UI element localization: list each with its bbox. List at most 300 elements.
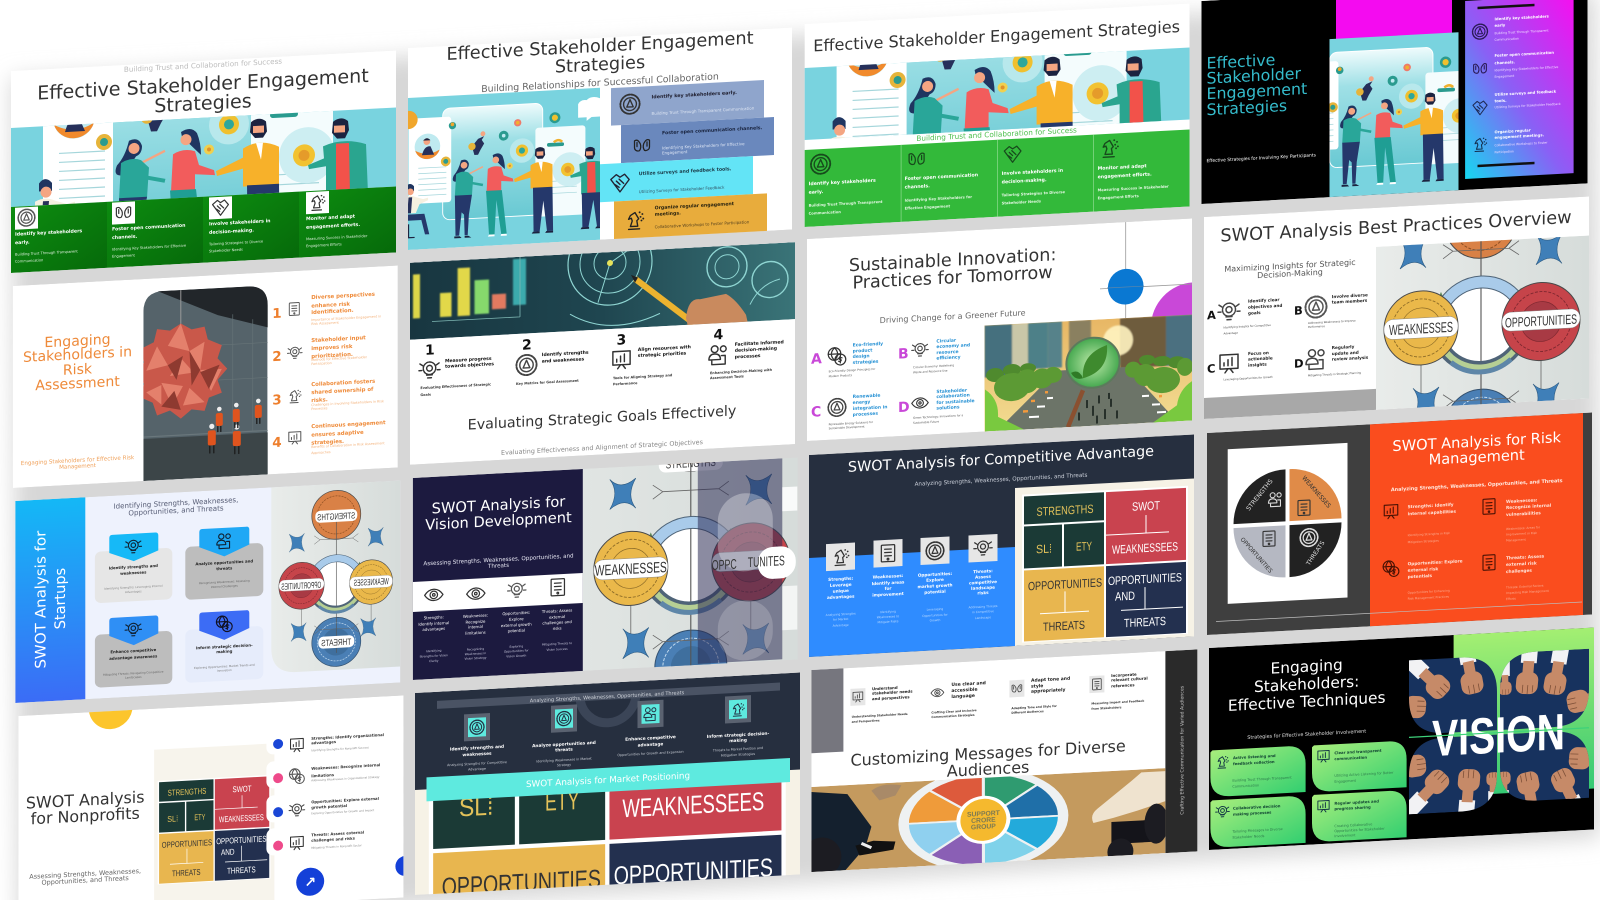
card 2: Utilizing Active Listening for Better bbox=[1334, 771, 1394, 778]
item descriptions: Opportunities for Enhancing bbox=[1408, 589, 1450, 595]
title: Evaluating Strategic Goals Effectively bbox=[468, 403, 737, 434]
gray footer bbox=[1204, 389, 1376, 419]
column headings: Assess bbox=[975, 574, 992, 580]
slide: SWOT Analysis for Vision Development: Mitigating Threats to bbox=[542, 641, 572, 647]
SWOT grid: OPPORTUNITIES bbox=[216, 834, 267, 846]
item headings: internal capabilities bbox=[1408, 509, 1456, 517]
item headings: integration in bbox=[853, 404, 887, 412]
item descriptions: Eco-Friendly Design Principles for bbox=[829, 367, 876, 373]
navy panel bbox=[413, 469, 583, 680]
card 3: making processes bbox=[1233, 810, 1272, 817]
title: Effective bbox=[1206, 50, 1275, 73]
subtitle: Management bbox=[59, 463, 97, 471]
white tile with quadrant pie bbox=[1228, 443, 1348, 604]
title: Customizing Messages for Diverse bbox=[850, 736, 1126, 770]
card 4: Creating Collaborative bbox=[1334, 822, 1372, 828]
box 1: Building Trust Through Transparent Communication bbox=[652, 106, 755, 116]
card 2: Analyze opportunities and bbox=[195, 558, 253, 566]
illustration bbox=[804, 48, 1190, 140]
mirrored SWOT circular diagram: OPPORTUNITIES bbox=[281, 580, 321, 592]
illustration bbox=[1330, 32, 1458, 197]
gradient list panel: channels. bbox=[1494, 59, 1516, 65]
turquoise title band bbox=[426, 758, 790, 801]
title: Strategies bbox=[555, 53, 645, 78]
column headings: potential bbox=[924, 589, 946, 595]
card 1: Advantages bbox=[125, 589, 142, 594]
column headings: Inform strategic decision- bbox=[707, 731, 769, 740]
white list panel: Identifying Strengths for Nonprofit Success bbox=[311, 745, 370, 752]
item headings: Use clear and bbox=[951, 680, 986, 688]
letters: B bbox=[898, 346, 909, 363]
card 2: Internal Challenges bbox=[211, 584, 238, 589]
white list panel: Threats: Assess external bbox=[311, 830, 364, 837]
item descriptions: Efforts bbox=[1506, 597, 1516, 601]
column descriptions: Mitigate Risks bbox=[878, 619, 899, 624]
item descriptions: Goals bbox=[420, 393, 431, 397]
round arrow button bbox=[296, 867, 324, 896]
SWOT grid: THREATS bbox=[1043, 618, 1085, 634]
letters: A bbox=[811, 351, 822, 368]
faint arc decoration bbox=[580, 693, 636, 724]
item descriptions: Sustainable Future bbox=[913, 419, 939, 425]
item headings: Measure progress bbox=[445, 356, 492, 364]
column headings: Threats: bbox=[973, 568, 993, 574]
item descriptions: Enhancing Decision-Making with bbox=[710, 368, 773, 375]
card 1: feedback collection bbox=[1233, 759, 1275, 766]
title: SWOT Analysis Best Practices Overview bbox=[1220, 208, 1572, 247]
gradient list panel: Identify key stakeholders bbox=[1494, 13, 1550, 21]
title: Management bbox=[1429, 447, 1525, 469]
gradient list panel: Utilizing Surveys for Stakeholder Feedback bbox=[1494, 102, 1561, 109]
column descriptions: Growth bbox=[930, 618, 941, 623]
white list panel: limitations bbox=[311, 772, 335, 778]
title: Assessment bbox=[35, 374, 120, 394]
card 4: Regular updates and bbox=[1334, 798, 1379, 806]
item descriptions: Leveraging Opportunities for Growth bbox=[1224, 375, 1273, 381]
column descriptions: Opportunities for bbox=[922, 613, 949, 618]
icon band bbox=[413, 573, 583, 612]
item headings: external risk bbox=[1506, 560, 1537, 568]
gradient list panel: Foster open communication bbox=[1494, 50, 1554, 58]
gradient list panel: Utilize surveys and feedback bbox=[1494, 89, 1557, 97]
slide: SWOT Analysis for Vision Development: Strengths for Vision bbox=[420, 653, 448, 659]
green band: early. bbox=[15, 239, 30, 246]
slide: SWOT Analysis for Vision Development: Identifying bbox=[426, 648, 442, 653]
mirrored SWOT circular diagram bbox=[271, 480, 400, 673]
turquoise title band: SWOT Analysis for Market Positioning bbox=[526, 771, 690, 790]
gradient list panel: engagement meetings. bbox=[1494, 132, 1545, 140]
box 4: meetings. bbox=[655, 210, 681, 218]
yellow half circle bbox=[89, 684, 133, 730]
gradient side bar with title: Startups bbox=[53, 567, 69, 630]
green band: Measuring Success in Stakeholder bbox=[306, 234, 368, 241]
item headings: goals bbox=[1248, 310, 1261, 316]
item headings: appropriately bbox=[1031, 687, 1066, 695]
dark side strip with rotated caption: Crafting Effective Communication for Varied Audiences bbox=[1179, 685, 1185, 815]
item descriptions: Identifying Strengths in Risk bbox=[1408, 531, 1450, 537]
SWOT grid: THREATS bbox=[227, 865, 256, 876]
SWOT grid: OPPORTUNITIES bbox=[1028, 575, 1102, 593]
gradient side bar with title bbox=[15, 497, 85, 703]
slide: Engaging Stakeholders in Risk Assessment bbox=[13, 265, 398, 488]
subtitle: Building Relationships for Successful Collaboration bbox=[481, 71, 719, 95]
item headings: vulnerabilities bbox=[1506, 510, 1541, 518]
box 1: Identify key stakeholders early. bbox=[652, 90, 737, 101]
card 2: Engagement bbox=[1334, 779, 1357, 784]
column descriptions: Weaknesses to bbox=[877, 614, 899, 619]
item headings: team members bbox=[1332, 298, 1368, 305]
item headings: and perspectives bbox=[872, 694, 910, 701]
item descriptions: Evaluating Effectiveness of Strategic bbox=[420, 382, 491, 390]
item descriptions: Performance bbox=[613, 381, 638, 386]
card 1: Communication bbox=[1232, 783, 1259, 789]
title: Vision Development bbox=[425, 509, 572, 534]
card 3: advantage awareness bbox=[109, 653, 158, 661]
column headings: Identify areas bbox=[872, 579, 905, 586]
item headings: efficiency bbox=[936, 354, 961, 362]
SWOT grid: STRENGTHS bbox=[1037, 502, 1094, 519]
letters: D bbox=[1294, 356, 1304, 371]
item headings: strategies bbox=[853, 359, 879, 366]
item descriptions: Green Technology: Innovations for a bbox=[913, 413, 964, 420]
SWOT grid: SWOT bbox=[233, 784, 252, 794]
gradient list panel: Building Trust Through Transparent bbox=[1494, 28, 1549, 35]
item headings: Align resources with bbox=[638, 344, 691, 353]
slide: Effective Stakeholder Engagement Strategies, black and magenta bbox=[1202, 0, 1588, 237]
item descriptions: Impacting Risk Management bbox=[1506, 589, 1550, 595]
box 3: Utilize surveys and feedback tools. bbox=[639, 166, 732, 177]
card 1: Building Trust Through Transparent bbox=[1232, 776, 1292, 783]
SWOT grid: SL⁞ bbox=[167, 814, 178, 824]
green band: Tailoring Strategies to Diverse bbox=[208, 240, 264, 247]
photo: VISION with hands in four lobes: VISION bbox=[1432, 703, 1565, 767]
item descriptions: Communication Strategies bbox=[931, 713, 975, 719]
card 3: Stakeholder Needs bbox=[1232, 834, 1265, 840]
column headings: Leverage bbox=[830, 582, 852, 588]
slide: Effective Stakeholder Engagement Strategies, green band bbox=[0, 0, 451, 344]
subtitle: Assessing Strengths, Weaknesses, bbox=[29, 867, 141, 881]
white list panel: Exploring Opportunities for Growth and Impact bbox=[311, 808, 374, 815]
SWOT grid: ETY bbox=[1076, 539, 1092, 554]
slide: SWOT Analysis for Vision Development bbox=[413, 393, 798, 717]
item headings: Adapt tone and bbox=[1031, 676, 1070, 684]
green band: Engagement bbox=[112, 253, 135, 259]
numbered list: 2 bbox=[272, 349, 282, 365]
icons bbox=[828, 343, 928, 417]
column headings: Identify strengths and bbox=[450, 744, 504, 753]
item descriptions: Threats: External Factors bbox=[1505, 584, 1544, 590]
columns of text: Recognize bbox=[466, 619, 486, 625]
item descriptions: Improvement in Risk bbox=[1506, 531, 1537, 537]
box 2: Engagement bbox=[662, 149, 688, 155]
green band: early. bbox=[809, 189, 823, 196]
slide: SWOT Analysis for Vision Development: Clarity bbox=[429, 659, 439, 663]
item headings: Incorporate bbox=[1111, 672, 1137, 678]
columns of text: advantages bbox=[422, 626, 445, 632]
subtitle: Driving Change for a Greener Future bbox=[880, 308, 1026, 325]
subtitle: Decision-Making bbox=[1257, 268, 1323, 280]
item headings: processes bbox=[735, 353, 761, 360]
white list panel: Opportunities: Explore external bbox=[311, 796, 379, 804]
item headings: economy and bbox=[936, 342, 970, 350]
column headings: Analyze opportunities and bbox=[532, 740, 596, 749]
column descriptions: for Market bbox=[833, 617, 849, 622]
box 3 bbox=[600, 156, 753, 202]
title: Audiences bbox=[947, 757, 1029, 781]
green band: Identify key stakeholders bbox=[15, 228, 82, 238]
slide: SWOT Analysis for Vision Development: Recognizing bbox=[467, 647, 484, 652]
column headings: improvement bbox=[872, 591, 904, 598]
numbered list bbox=[272, 291, 386, 457]
white list panel: challenges and risks bbox=[311, 836, 356, 843]
item headings: processes bbox=[853, 411, 878, 418]
SWOT grid: AND bbox=[1115, 589, 1135, 604]
column headings: Enhance competitive bbox=[625, 734, 676, 743]
subtitle bar: Analyzing Strengths, Weaknesses, Opportunities, and Threats bbox=[530, 690, 685, 704]
dark header panel bbox=[415, 672, 800, 790]
item descriptions: Modern Products bbox=[829, 373, 853, 378]
slide: SWOT Analysis for Vision Development: Exploring bbox=[510, 644, 523, 649]
title: SWOT Analysis bbox=[26, 787, 144, 813]
item headings: Eco-friendly bbox=[853, 341, 883, 349]
white list panel: Weaknesses: Recognize internal bbox=[311, 762, 380, 771]
subtitle: Engaging Stakeholders for Effective Risk bbox=[21, 455, 135, 467]
SWOT circular diagram bbox=[1376, 236, 1589, 410]
white list panel: Mitigating Threats in Nonprofit Sector bbox=[311, 843, 363, 850]
photo: city with magnifying glass bbox=[984, 314, 1192, 432]
column headings: Weaknesses: bbox=[873, 573, 904, 580]
title: SWOT Analysis for bbox=[432, 493, 565, 517]
item headings: update and bbox=[1332, 350, 1359, 356]
card 3 bbox=[1210, 795, 1306, 848]
title: SWOT Analysis for Risk bbox=[1392, 429, 1561, 455]
card 1 bbox=[1210, 745, 1306, 797]
white tile with quadrant pie: THREATS bbox=[1305, 540, 1327, 568]
green band: Building Trust Through Transparent bbox=[15, 249, 78, 257]
card 2: threats bbox=[216, 565, 233, 571]
column headings: Opportunities: bbox=[918, 571, 952, 578]
item descriptions: Risk Management Practices bbox=[1408, 595, 1449, 601]
subtitle: Maximizing Insights for Strategic bbox=[1224, 258, 1356, 274]
item headings: Involve diverse bbox=[1332, 292, 1368, 299]
title: Strategies bbox=[154, 89, 252, 117]
title: Engaging bbox=[1271, 656, 1343, 678]
columns of text: potential bbox=[508, 628, 525, 633]
slide: SWOT Analysis for Risk Management bbox=[1207, 412, 1592, 635]
card 3: Collaborative decision bbox=[1233, 803, 1281, 811]
illustration bbox=[11, 108, 396, 207]
card 4: Involvement bbox=[1334, 833, 1356, 838]
letters: A bbox=[1207, 308, 1216, 322]
item descriptions: Tools for Aligning Strategy and bbox=[613, 373, 673, 380]
numbered list: prioritization. bbox=[311, 352, 353, 360]
card 4: Inform strategic decision- bbox=[196, 642, 253, 650]
card 2: Clear and transparent bbox=[1334, 748, 1382, 755]
item headings: Identify clear bbox=[1248, 297, 1280, 304]
card 4: Opportunities for Stakeholder bbox=[1334, 827, 1385, 833]
numbered list: 1 bbox=[272, 306, 282, 322]
card 1: weaknesses bbox=[120, 569, 147, 576]
card 3: Landscapes bbox=[125, 675, 142, 680]
green band: Foster open communication bbox=[905, 172, 978, 182]
item descriptions: Sustainable Development bbox=[829, 424, 866, 430]
item descriptions: Renewable Energy Solutions for bbox=[829, 420, 874, 426]
green band: Involve stakeholders in bbox=[209, 218, 271, 227]
numbered list: 4 bbox=[272, 435, 282, 451]
subtitle: Building Trust and Collaboration for Success bbox=[916, 125, 1077, 143]
SWOT grid: WEAKNESSEES bbox=[219, 813, 264, 824]
item descriptions: Mitigating Threats in Strategic Planning bbox=[1308, 371, 1361, 377]
card 1 bbox=[95, 532, 172, 603]
column descriptions: Landscape bbox=[975, 615, 991, 620]
title: Practices for Tomorrow bbox=[852, 263, 1053, 294]
numbered list: Diverse perspectives bbox=[311, 292, 375, 301]
white tile with quadrant pie: OPPORTUNITIES bbox=[1239, 537, 1273, 575]
item descriptions: Identifying Insights for Competitive bbox=[1224, 323, 1271, 329]
enlarged SWOT grid bbox=[429, 671, 786, 900]
item headings: Renewable bbox=[853, 393, 880, 400]
item headings: and weaknesses bbox=[542, 356, 585, 365]
numbered list: Continuous engagement bbox=[311, 420, 386, 430]
item headings: Facilitate informed bbox=[735, 339, 784, 348]
green band: decision-making. bbox=[1002, 177, 1047, 186]
slide: Engaging Stakeholders: Effective Techniques bbox=[1209, 623, 1600, 851]
columns of text: Opportunities: bbox=[502, 610, 530, 616]
slide: SWOT Analysis for Market Positioning bbox=[415, 670, 800, 900]
green band: Communication bbox=[809, 210, 841, 216]
title: Effective Stakeholder Engagement bbox=[37, 64, 369, 105]
item descriptions: Addressing Weaknesses to Improve bbox=[1308, 318, 1356, 325]
letters: D bbox=[898, 400, 910, 416]
cropped blue dot bbox=[395, 855, 415, 876]
card 4 bbox=[1312, 790, 1407, 842]
box 2 bbox=[621, 117, 774, 163]
column headings: threats bbox=[555, 747, 573, 754]
column descriptions: Analyzing Strengths for Competitive bbox=[447, 760, 507, 767]
icon tiles bbox=[826, 534, 998, 571]
SWOT circular diagram: WEAKNESSES bbox=[595, 559, 667, 580]
card 3: Tailoring Messages to Diverse bbox=[1231, 827, 1283, 834]
item headings: solutions bbox=[936, 404, 960, 412]
gradient list panel: early bbox=[1494, 22, 1506, 28]
title: Stakeholders in bbox=[23, 344, 132, 366]
item headings: towards objectives bbox=[445, 361, 494, 370]
icons bbox=[1218, 296, 1326, 374]
box 2: Identifying Key Stakeholders for Effective bbox=[662, 141, 745, 150]
numbered list: Stakeholder input bbox=[311, 335, 366, 344]
card 3 bbox=[95, 615, 172, 688]
gradient list panel: Participation bbox=[1494, 149, 1514, 154]
card 2 bbox=[1312, 740, 1407, 792]
footer rule bbox=[1216, 602, 1582, 622]
green band: Identifying Key Stakeholders for bbox=[905, 195, 972, 203]
green band: Identify key stakeholders bbox=[809, 178, 876, 187]
SWOT grid bbox=[1015, 478, 1194, 646]
numbered list: Importance of Stakeholder Engagement in bbox=[311, 314, 381, 322]
column descriptions: Analyzing Strengths bbox=[826, 611, 856, 617]
item headings: product bbox=[853, 347, 873, 355]
icons bbox=[850, 675, 1104, 706]
photo: support group wheel on wooden floor: CRORE bbox=[971, 817, 996, 825]
purple circle bbox=[1151, 280, 1235, 369]
numbered list: Participation bbox=[311, 361, 332, 366]
title: Stakeholders: bbox=[1254, 672, 1359, 696]
round arrow button: ↗ bbox=[304, 875, 316, 891]
title: Sustainable Innovation: bbox=[849, 245, 1056, 276]
gradient list panel: Engagement bbox=[1494, 74, 1515, 79]
dark translucent overlay with cut off word bbox=[698, 458, 797, 664]
card 2: Recognizing Weaknesses: Assessing bbox=[199, 579, 250, 585]
slide: SWOT Analysis for Vision Development: Vision Success bbox=[547, 647, 568, 652]
columns of text: external growth bbox=[501, 621, 532, 628]
slide: SWOT Analysis for Vision Development: Weaknesses in bbox=[465, 651, 486, 656]
subtitle: Opportunities, and Threats bbox=[42, 874, 129, 887]
photo: polyhedral ball and figures bbox=[143, 286, 268, 481]
column descriptions: in Competitive bbox=[972, 609, 994, 614]
columns of text: risks bbox=[553, 626, 562, 631]
item headings: energy bbox=[853, 399, 870, 406]
green band: Stakeholder Needs bbox=[1002, 199, 1042, 206]
illustration bbox=[408, 88, 600, 250]
enlarged SWOT grid: SL⁞ bbox=[459, 793, 493, 822]
gray corner block bbox=[811, 668, 843, 753]
item descriptions: Measuring Impact and Feedback bbox=[1091, 699, 1144, 706]
box 1 bbox=[611, 80, 764, 126]
title: SWOT Analysis for Competitive Advantage bbox=[848, 444, 1154, 476]
green band: Communication bbox=[15, 258, 43, 264]
gradient list panel bbox=[1465, 0, 1574, 179]
item headings: Threats: Assess bbox=[1506, 554, 1545, 562]
item headings: Weaknesses: bbox=[1506, 497, 1538, 505]
title: Effective Stakeholder Engagement bbox=[446, 29, 754, 65]
card 2: communication bbox=[1334, 755, 1367, 761]
green band: Identifying Key Stakeholders for Effective bbox=[112, 244, 187, 252]
item descriptions: Adapting Tone and Style for bbox=[1011, 704, 1057, 710]
gradient list panel: Communication bbox=[1494, 37, 1519, 42]
item headings: objectives and bbox=[1248, 303, 1282, 310]
item headings: Opportunities: Explore bbox=[1408, 558, 1463, 567]
title: Engaging bbox=[44, 332, 111, 351]
SWOT grid: AND bbox=[221, 847, 235, 857]
column descriptions: Addressing Threats bbox=[969, 604, 998, 609]
column descriptions: Leveraging bbox=[927, 607, 943, 612]
numbers: 2 bbox=[522, 337, 532, 354]
item headings: review analysis bbox=[1332, 355, 1369, 362]
green band: Effective Engagement bbox=[905, 204, 950, 211]
columns of text: Strengths: bbox=[424, 614, 444, 620]
column descriptions: Advantage bbox=[468, 767, 486, 772]
SWOT circular diagram: WEAKNESSES bbox=[1389, 320, 1453, 339]
item headings: challenges bbox=[1506, 568, 1532, 575]
SWOT circular diagram bbox=[594, 394, 790, 707]
column headings: landscape bbox=[971, 585, 995, 591]
gradient side bar with title: SWOT Analysis for bbox=[33, 530, 49, 669]
title: Effective Techniques bbox=[1228, 689, 1386, 715]
green band: engagement efforts. bbox=[1098, 171, 1152, 180]
white list panel: advantages bbox=[311, 739, 337, 745]
green band: Monitor and adapt bbox=[1098, 163, 1147, 172]
numbered list: strategies. bbox=[311, 439, 344, 447]
item headings: Strengths: Identify bbox=[1408, 502, 1454, 510]
box 4: Organize regular engagement bbox=[655, 201, 735, 211]
column descriptions: Advantage bbox=[833, 623, 849, 628]
SWOT circular diagram: STRENGTHS bbox=[666, 457, 716, 472]
slide: Evaluating Strategic Goals Effectively bbox=[410, 211, 795, 465]
green band: decision-making. bbox=[209, 228, 254, 236]
item headings: style bbox=[1031, 683, 1043, 690]
enlarged SWOT grid: ETY bbox=[545, 787, 579, 817]
card 4: Exploring Opportunities: Market Trends and bbox=[194, 663, 255, 670]
